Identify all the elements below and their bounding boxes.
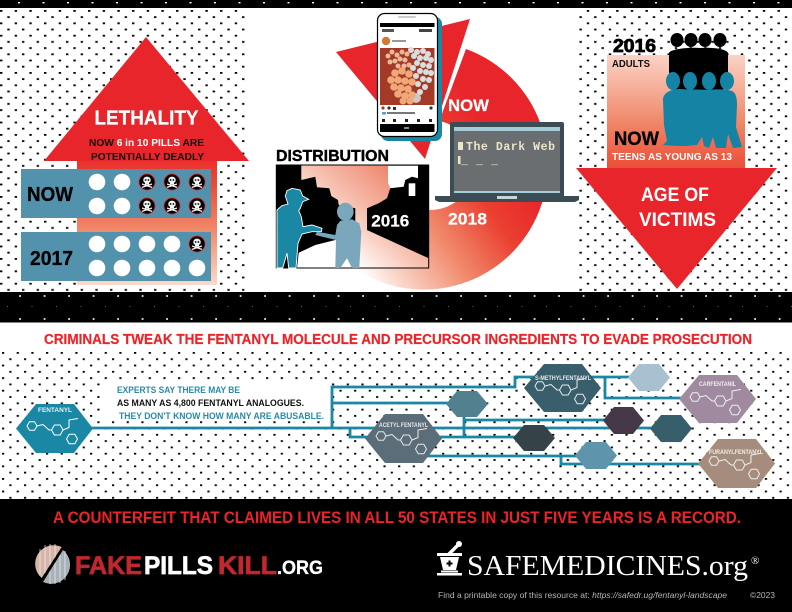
lethality arrow xyxy=(44,37,249,285)
icon: mortar and pestle xyxy=(437,541,462,576)
footer note: Find a printable copy of this resource at: https://safedr.ug/fentanyl-landscape xyxy=(438,591,728,600)
circular arrow xyxy=(336,19,548,290)
victims heading: VICTIMS xyxy=(639,210,716,231)
lethality subtext xyxy=(89,137,204,163)
hexagon: fentanyl: FENTANYL xyxy=(38,408,72,414)
lethality heading: LETHALITY xyxy=(94,108,199,130)
registered mark: ® xyxy=(751,555,759,567)
label: now: NOW xyxy=(448,96,490,115)
label: now teens xyxy=(612,128,732,163)
victims heading xyxy=(639,185,716,231)
footer note: ©2023 xyxy=(750,591,776,600)
laptop: _ _ _ xyxy=(460,155,498,168)
analogues text: AS MANY AS 4,800 FENTANYL ANALOGUES. xyxy=(117,398,304,408)
label: now teens: TEENS AS YOUNG AS 13 xyxy=(612,151,732,163)
row: now pills: NOW xyxy=(27,183,74,206)
laptop: The Dark Web xyxy=(466,141,555,154)
phone xyxy=(378,14,442,141)
label: 2016 adults: 2016 xyxy=(613,36,656,56)
victims heading: AGE OF xyxy=(641,185,709,206)
row: 2017 pills xyxy=(21,232,211,281)
black adult silhouettes xyxy=(669,33,728,95)
person: buyer xyxy=(315,203,361,268)
street scene 2016 xyxy=(276,165,429,268)
laptop xyxy=(435,122,579,202)
wordmark xyxy=(75,552,323,580)
connecting lines xyxy=(90,377,702,464)
wordmark: KILL xyxy=(218,552,277,580)
panel: distribution xyxy=(276,14,579,290)
panel: lethality xyxy=(21,37,249,285)
wordmark: SAFEMEDICINES.org xyxy=(467,551,748,582)
hexagon: s-methylfentanyl: S-METHYLFENTANYL xyxy=(535,376,591,382)
lethality subtext: NOW 6 in 10 PILLS ARE xyxy=(89,137,204,149)
label: 2018: 2018 xyxy=(448,210,487,228)
label: now teens: NOW xyxy=(614,128,660,150)
panel: age of victims xyxy=(576,33,777,289)
logo: safe medicines xyxy=(437,541,759,582)
distribution heading: DISTRIBUTION xyxy=(276,148,389,165)
hexagon: furanylfentanyl: FURANYLFENTANYL xyxy=(709,450,763,456)
row: 2017 pills: 2017 xyxy=(30,248,73,270)
label: 2016 adults xyxy=(612,36,656,70)
analogues text xyxy=(117,385,324,421)
wordmark: PILLS xyxy=(144,552,213,580)
hexagon: acetyl fentanyl: ACETYL FENTANYL xyxy=(379,423,428,429)
hexagon: carfentanil xyxy=(679,375,756,423)
street scene 2016: 2016 xyxy=(371,212,409,231)
person: seller xyxy=(277,188,322,268)
teal teen silhouettes xyxy=(663,72,742,148)
hexagon: s-methylfentanyl xyxy=(524,364,601,412)
wordmark: FAKE xyxy=(75,552,142,580)
victims arrow xyxy=(576,55,777,289)
lethality subtext: POTENTIALLY DEADLY xyxy=(91,151,204,163)
analogues text: THEY DON'T KNOW HOW MANY ARE ABUSABLE. xyxy=(119,411,324,421)
hexagon: carfentanil: CARFENTANIL xyxy=(699,382,736,388)
icon: split pill xyxy=(35,544,70,584)
molecule section heading: CRIMINALS TWEAK THE FENTANYL MOLECULE AND PRECURSOR INGREDIENTS TO EVADE PROSECUTION xyxy=(44,332,752,348)
row: now pills xyxy=(21,169,211,218)
hexagon: fentanyl xyxy=(16,404,93,453)
hexagon: furanylfentanyl xyxy=(698,439,775,488)
molecule network xyxy=(16,364,775,488)
footer headline: A COUNTERFEIT THAT CLAIMED LIVES IN ALL 50 STATES IN JUST FIVE YEARS IS A RECORD. xyxy=(53,509,741,527)
hexagon: acetyl fentanyl xyxy=(365,414,442,463)
analogues text: EXPERTS SAY THERE MAY BE xyxy=(117,385,240,395)
logo: fake pills kill xyxy=(35,544,323,584)
pills xyxy=(386,47,434,104)
label: 2016 adults: ADULTS xyxy=(612,58,650,70)
wordmark: .ORG xyxy=(277,558,323,579)
small unlabelled hexagons xyxy=(446,364,692,469)
